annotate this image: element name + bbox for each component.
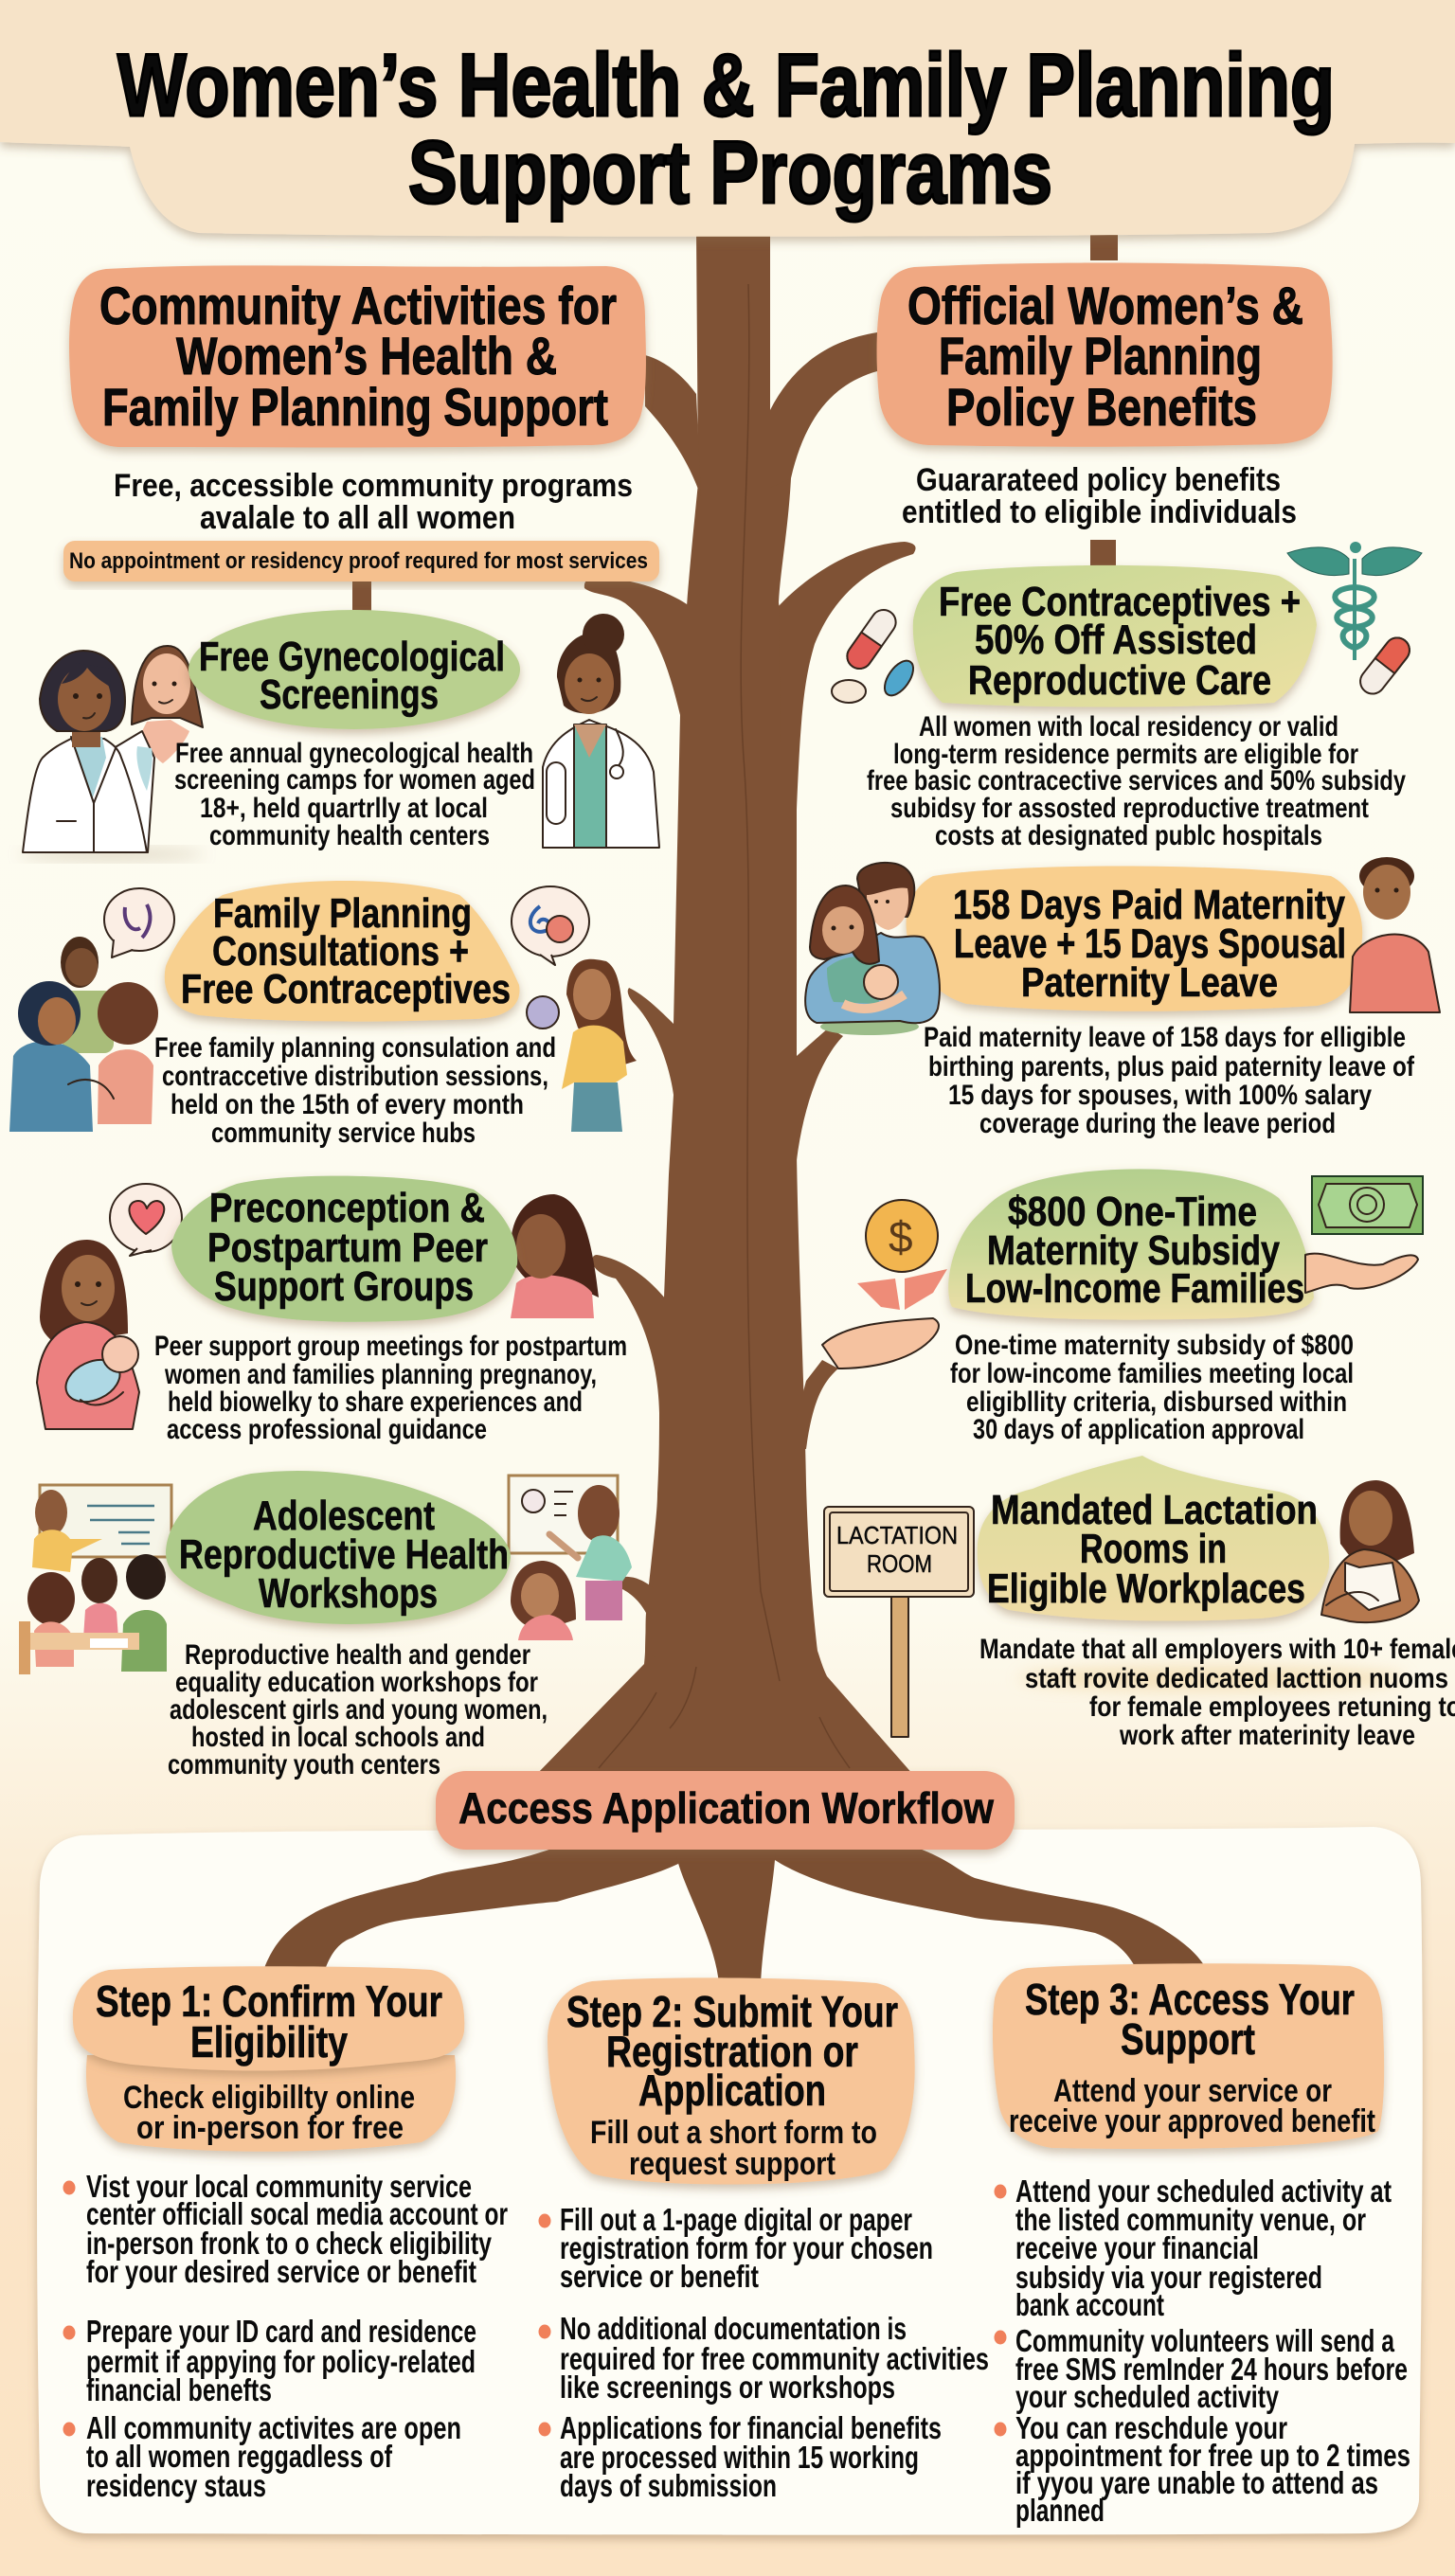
card: lactation rooms: Mandated Lactation bbox=[991, 1487, 1318, 1533]
step 2 bullets: service or benefit bbox=[560, 2259, 759, 2294]
card: adolescent workshops: Reproductive health and gender bbox=[185, 1639, 530, 1671]
icon: lactation room sign: ROOM bbox=[867, 1549, 932, 1578]
step 1 card: Step 1: Confirm Your bbox=[96, 1977, 442, 2026]
card: free contraceptives: 50% Off Assisted bbox=[975, 617, 1257, 663]
step 1 bullets: Prepare your ID card and residence bbox=[86, 2314, 476, 2349]
step 1 bullets: financial benefts bbox=[86, 2372, 272, 2407]
step 3 card: Step 3: Access Your bbox=[1025, 1975, 1355, 2024]
card: free gynecological screenings: Free annual gynecologjcal health bbox=[175, 738, 533, 769]
card: family planning consultations bbox=[154, 881, 556, 1149]
card: adolescent workshops: Reproductive Health bbox=[179, 1531, 509, 1578]
card: adolescent workshops: equality education workshops for bbox=[175, 1667, 538, 1698]
step 2 bullets: required for free community activities bbox=[560, 2341, 989, 2376]
card: free gynecological screenings: community health centers bbox=[209, 820, 490, 851]
card: family planning consultations: Consultations + bbox=[212, 928, 469, 975]
card: maternity subsidy bbox=[948, 1169, 1354, 1445]
step 2 bullets: Fill out a 1-page digital or paper bbox=[560, 2202, 912, 2237]
title bbox=[117, 35, 1335, 222]
card: paid maternity leave: coverage during the leave period bbox=[979, 1108, 1336, 1139]
step 1 card: Check eligibillty online bbox=[123, 2080, 415, 2116]
tree trunk and branches bbox=[352, 227, 1118, 1776]
step 1 bullets: permit if appying for policy-related bbox=[86, 2344, 476, 2379]
callout: no appointment bbox=[63, 541, 659, 581]
step 3 bullets: your scheduled activity bbox=[1015, 2379, 1279, 2414]
community intro text: avalale to all all women bbox=[200, 500, 515, 536]
step 2 bullets: Applications for financial benefits bbox=[560, 2410, 942, 2445]
step 2 card: Registration or bbox=[606, 2027, 858, 2076]
card: paid maternity leave: 15 days for spouses, with 100% salary bbox=[948, 1080, 1372, 1111]
workflow heading pill: Access Application Workflow bbox=[458, 1783, 994, 1833]
panel: community activities heading: Community Activities for bbox=[99, 276, 617, 335]
icon: banknote and receiving hand bbox=[1305, 1176, 1423, 1293]
card: free gynecological screenings: Free Gynecological bbox=[199, 634, 505, 680]
policy intro text bbox=[902, 462, 1297, 530]
panel: community activities heading bbox=[69, 265, 646, 447]
card: maternity subsidy: $800 One-Time bbox=[1008, 1189, 1257, 1235]
card: free contraceptives: costs at designated publc hospitals bbox=[935, 820, 1322, 851]
step 2 bullets: No additional documentation is bbox=[560, 2311, 907, 2346]
step 3 bullets: bank account bbox=[1015, 2287, 1164, 2322]
card: preconception and postpartum: held biowelky to share experiences and bbox=[168, 1386, 583, 1418]
card: lactation rooms: Eligible Workplaces bbox=[987, 1565, 1305, 1612]
card: family planning consultations: Free Contraceptives bbox=[181, 966, 511, 1012]
step 3 bullets: subsidy via your registered bbox=[1015, 2260, 1322, 2295]
card: paid maternity leave: Leave + 15 Days Spousal bbox=[954, 921, 1346, 967]
card: maternity subsidy: for low-income families meeting local bbox=[950, 1358, 1354, 1389]
card: lactation rooms: Rooms in bbox=[1080, 1526, 1227, 1572]
step 2 bullets: registration form for your chosen bbox=[560, 2230, 933, 2265]
icon: coin, leaves and hand: $ bbox=[889, 1212, 913, 1261]
step 2 card: request support bbox=[629, 2146, 835, 2182]
step 1 bullets: All community activites are open bbox=[86, 2410, 461, 2445]
step 3 bullets: You can reschdule your bbox=[1015, 2410, 1287, 2445]
card: adolescent workshops bbox=[166, 1471, 548, 1780]
step 1 bullets: to all women reggadless of bbox=[86, 2439, 393, 2474]
step 1 card: or in-person for free bbox=[136, 2110, 404, 2146]
step 1 bullets bbox=[63, 2169, 508, 2503]
card: preconception and postpartum: Preconception & bbox=[209, 1185, 485, 1231]
step 1 bullets: Vist your local community service bbox=[86, 2169, 472, 2204]
card: free gynecological screenings: Screenings bbox=[260, 671, 439, 718]
card: maternity subsidy: One-time maternity subsidy of $800 bbox=[955, 1330, 1354, 1361]
step 2 card: Fill out a short form to bbox=[590, 2115, 877, 2151]
card: preconception and postpartum: Peer support group meetings for postpartum bbox=[154, 1331, 627, 1362]
step 3 card: receive your approved benefit bbox=[1009, 2103, 1375, 2139]
card: maternity subsidy: eligibllity criteria, disbursed within bbox=[966, 1386, 1347, 1418]
icon: two doctors left bbox=[19, 614, 659, 859]
icon: breastfeeding woman bbox=[1321, 1480, 1419, 1622]
card: adolescent workshops: adolescent girls and young women, bbox=[170, 1694, 548, 1726]
step 1 bullets: for your desired service or benefit bbox=[86, 2254, 476, 2289]
panel: community activities heading: Family Planning Support bbox=[102, 377, 608, 437]
step 1 bullets: in-person fronk to o check eligibility bbox=[86, 2226, 492, 2261]
community intro text bbox=[114, 468, 633, 536]
panel: community activities heading: Women’s Health & bbox=[176, 326, 557, 385]
card: family planning consultations: contraccetive distribution sessions, bbox=[162, 1061, 548, 1092]
card: paid maternity leave: Paternity Leave bbox=[1021, 959, 1278, 1006]
card: free contraceptives bbox=[867, 565, 1406, 851]
step 2 card: Step 2: Submit Your bbox=[566, 1987, 898, 2036]
icon: family with baby bbox=[805, 857, 1440, 1035]
card: free contraceptives: Reproductive Care bbox=[968, 657, 1271, 704]
card: preconception and postpartum: access professional guidance bbox=[167, 1414, 487, 1445]
icon: mother with baby and peer bbox=[37, 1184, 599, 1429]
card: paid maternity leave bbox=[907, 866, 1415, 1139]
step 3 bullets: planned bbox=[1015, 2493, 1105, 2528]
card: lactation rooms bbox=[978, 1456, 1455, 1751]
icon: lactation room sign: LACTATION bbox=[836, 1521, 958, 1549]
step 3 bullets: receive your financial bbox=[1015, 2230, 1259, 2265]
panel: official policy heading: Official Women’s & bbox=[907, 276, 1303, 335]
card: free gynecological screenings bbox=[174, 610, 535, 851]
card: preconception and postpartum: Postpartum Peer bbox=[207, 1225, 488, 1271]
workflow heading pill bbox=[436, 1771, 1015, 1850]
panel: official policy heading bbox=[877, 263, 1333, 447]
card: preconception and postpartum bbox=[154, 1176, 627, 1445]
step 1 card: Eligibility bbox=[190, 2017, 348, 2066]
panel: official policy heading: Policy Benefits bbox=[946, 377, 1257, 437]
step 1 bullets: center officiall socal media account or bbox=[86, 2196, 508, 2231]
panel: official policy heading: Family Planning bbox=[939, 326, 1262, 385]
community intro text: Free, accessible community programs bbox=[114, 468, 633, 504]
policy intro text: Guararateed policy benefits bbox=[916, 462, 1281, 498]
roots to steps bbox=[264, 1842, 1206, 1984]
icon: lactation room sign bbox=[824, 1507, 974, 1737]
card: free gynecological screenings: 18+, held quartrlly at local bbox=[200, 793, 488, 824]
icon: coin, leaves and hand bbox=[822, 1200, 947, 1368]
card: adolescent workshops: hosted in local schools and bbox=[191, 1722, 485, 1753]
card: maternity subsidy: 30 days of application approval bbox=[973, 1414, 1304, 1445]
policy intro text: entitled to eligible individuals bbox=[902, 494, 1297, 530]
step 2 bullets: days of submission bbox=[560, 2468, 777, 2503]
card: family planning consultations: Family Planning bbox=[213, 890, 472, 937]
card: free gynecological screenings: screening camps for women aged bbox=[174, 764, 535, 796]
title: Support Programs bbox=[408, 122, 1052, 222]
card: family planning consultations: community service hubs bbox=[211, 1118, 476, 1149]
card: family planning consultations: Free family planning consulation and bbox=[154, 1032, 556, 1064]
step 2 bullets bbox=[538, 2202, 989, 2503]
card: adolescent workshops: Adolescent bbox=[253, 1493, 435, 1539]
card: free contraceptives: All women with local residency or valid bbox=[919, 711, 1338, 742]
step 3 card: Support bbox=[1121, 2014, 1255, 2064]
icon: pills and caduceus bbox=[832, 542, 1422, 703]
card: family planning consultations: held on the 15th of every month bbox=[171, 1089, 524, 1120]
card: paid maternity leave: 158 Days Paid Maternity bbox=[953, 882, 1345, 928]
card: preconception and postpartum: Support Groups bbox=[214, 1263, 474, 1310]
step 3 bullets bbox=[995, 2174, 1410, 2528]
card: adolescent workshops: community youth centers bbox=[168, 1749, 440, 1780]
card: maternity subsidy: Maternity Subsidy bbox=[987, 1227, 1280, 1274]
card: adolescent workshops: Workshops bbox=[259, 1570, 438, 1617]
card: maternity subsidy: Low-Income Families bbox=[965, 1265, 1304, 1312]
callout: no appointment: No appointment or residency proof requred for most services bbox=[69, 548, 648, 574]
step 1 bullets: residency staus bbox=[86, 2468, 266, 2503]
card: preconception and postpartum: women and families planning pregnanoy, bbox=[164, 1359, 597, 1390]
step 1 card bbox=[73, 1966, 464, 2152]
step 2 card: Application bbox=[638, 2066, 826, 2115]
icon: adolescent workshop classroom bbox=[19, 1476, 632, 1674]
panel: application workflow background bbox=[37, 1827, 1423, 2535]
title banner bbox=[0, 0, 1455, 237]
card: free contraceptives: Free Contraceptives + bbox=[939, 579, 1301, 625]
step 2 card bbox=[548, 1977, 915, 2184]
step 2 bullets: are processed within 15 working bbox=[560, 2440, 919, 2475]
icon: family planning consultation group bbox=[9, 886, 637, 1132]
step 3 card bbox=[993, 1963, 1384, 2149]
step 3 card: Attend your service or bbox=[1053, 2073, 1332, 2109]
step 2 bullets: like screenings or workshops bbox=[560, 2370, 895, 2405]
